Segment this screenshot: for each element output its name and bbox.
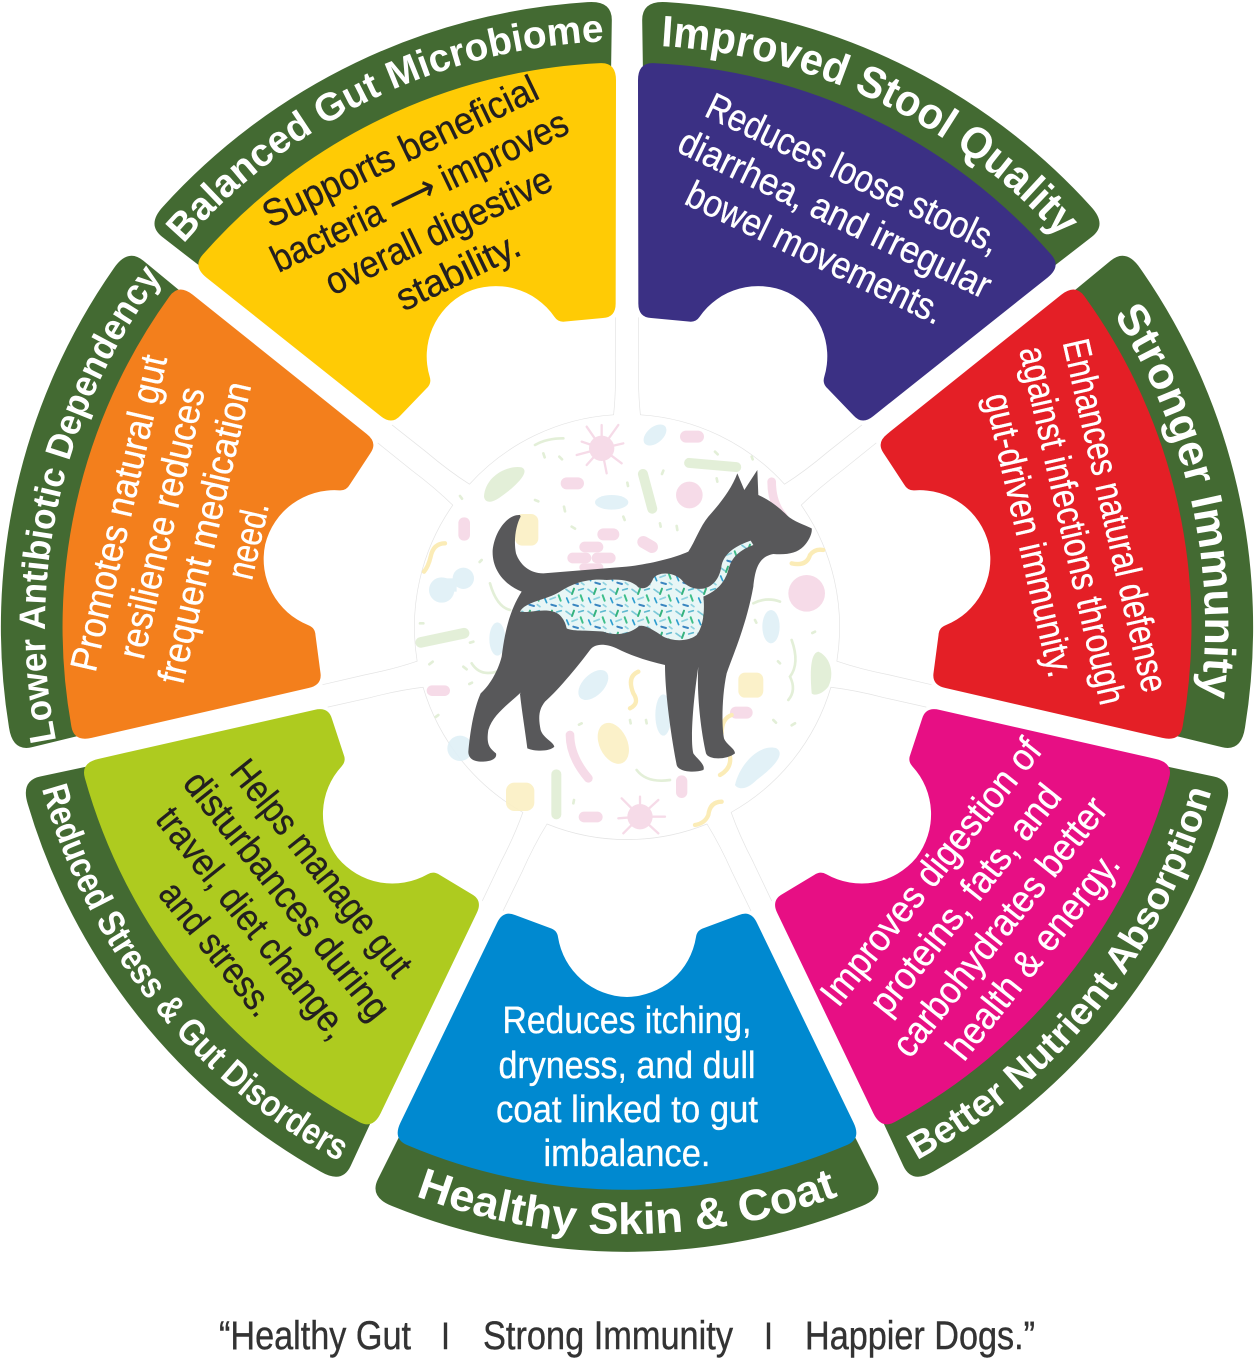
icon: gut microbiome: [520, 541, 753, 640]
heading: reduced stress and gut disorders: Reduced Stress & Gut Disorders: [42, 783, 346, 1159]
text: improved stool quality description: diarrhea, and irregular: [671, 121, 998, 307]
heading: improved stool quality: Improved Stool Quality: [663, 16, 1078, 234]
text: balanced gut microbiome description: bacteria ⟶ improves: [264, 102, 575, 281]
icon: dog silhouette: [468, 470, 812, 772]
tagline: I: [441, 1316, 450, 1358]
tagline: Strong Immunity: [483, 1314, 733, 1358]
text: reduced stress description: travel, diet change,: [147, 799, 357, 1048]
text: lower antibiotic dependency description: need.: [220, 498, 278, 583]
panel: reduced stress and gut disorders: [26, 687, 523, 1177]
text: better nutrient absorption description: health & energy.: [938, 844, 1129, 1068]
text: reduced stress description: [106, 736, 433, 1084]
text: balanced gut microbiome description: [245, 63, 614, 361]
panel: balanced gut microbiome: [154, 2, 616, 484]
text: healthy skin and coat description: imbalance.: [544, 1133, 710, 1175]
text: stronger immunity description: gut-driven immunity.: [976, 389, 1081, 681]
center illustration: dog with gut microbes: [414, 420, 831, 833]
panel: healthy skin and coat: [376, 824, 878, 1252]
text: healthy skin and coat description: coat linked to gut: [496, 1089, 758, 1131]
heading: balanced gut microbiome: Balanced Gut Microbiome: [165, 21, 602, 242]
text: lower antibiotic dependency description: resilience reduces: [111, 383, 214, 663]
text: healthy skin and coat description: Reduces itching,: [502, 1000, 752, 1042]
text: healthy skin and coat description: dryness, and dull: [498, 1045, 756, 1087]
heading: healthy skin and coat: Healthy Skin & Coat: [418, 1168, 838, 1239]
panel: stronger immunity: [801, 256, 1254, 748]
text: improved stool quality description: Reduces loose stools,: [699, 86, 1007, 263]
text: healthy skin and coat description: [496, 1000, 758, 1175]
text: better nutrient absorption description: proteins, fats, and: [862, 776, 1070, 1023]
text: better nutrient absorption description: carbohydrates better: [884, 789, 1117, 1065]
microbe background: [414, 420, 831, 833]
text: balanced gut microbiome description: overall digestive: [318, 159, 559, 304]
text: stronger immunity description: against infections through: [1010, 342, 1133, 709]
text: reduced stress description: and stress.: [150, 874, 283, 1025]
panel: improved stool quality: [638, 2, 1100, 484]
text: stronger immunity description: [967, 333, 1176, 718]
tagline: Happier Dogs.”: [805, 1314, 1035, 1358]
heading: stronger immunity: Stronger Immunity: [1118, 304, 1236, 700]
text: reduced stress description: disturbances during: [175, 763, 398, 1029]
text: improved stool quality description: bowel movements.: [679, 174, 950, 333]
text: stronger immunity description: Enhances natural defense: [1054, 335, 1175, 696]
text: better nutrient absorption description: [812, 730, 1154, 1096]
text: reduced stress description: Helps manage gut: [221, 752, 420, 986]
panel: lower antibiotic dependency: [0, 256, 453, 748]
heading: better nutrient absorption: Better Nutrient Absorption: [906, 789, 1211, 1160]
panel: better nutrient absorption: [730, 687, 1228, 1177]
tagline: [219, 1314, 1035, 1358]
text: better nutrient absorption description: Improves digestion of: [812, 730, 1051, 1014]
text: lower antibiotic dependency description: Promotes natural gut: [63, 351, 176, 675]
text: balanced gut microbiome description: Supports beneficial: [256, 68, 545, 236]
tagline: I: [764, 1316, 773, 1358]
text: lower antibiotic dependency description: frequent medication: [151, 378, 260, 688]
heading: lower antibiotic dependency: Lower Antibiotic Dependency: [20, 266, 161, 743]
text: balanced gut microbiome description: stability.: [389, 224, 527, 320]
tagline: “Healthy Gut: [219, 1314, 411, 1358]
text: lower antibiotic dependency description: [63, 351, 305, 705]
